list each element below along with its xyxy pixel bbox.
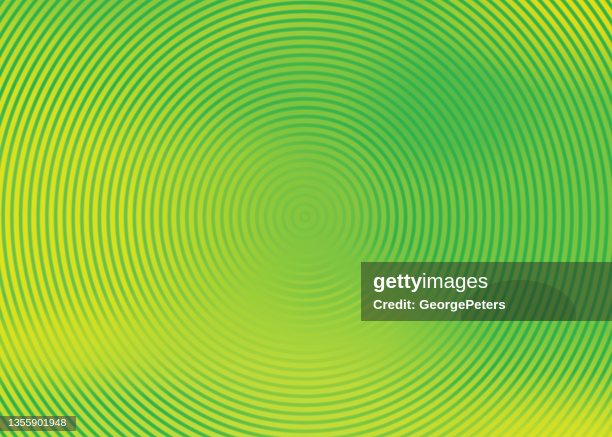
image id label <box>0 416 76 431</box>
watermark logo text: gettyimages <box>373 270 488 293</box>
watermark credit text: Credit: GeorgePeters <box>373 297 506 312</box>
image id label: 1355901948 <box>8 417 66 429</box>
watermark panel <box>361 262 612 321</box>
watermark shadow shape <box>461 280 576 350</box>
